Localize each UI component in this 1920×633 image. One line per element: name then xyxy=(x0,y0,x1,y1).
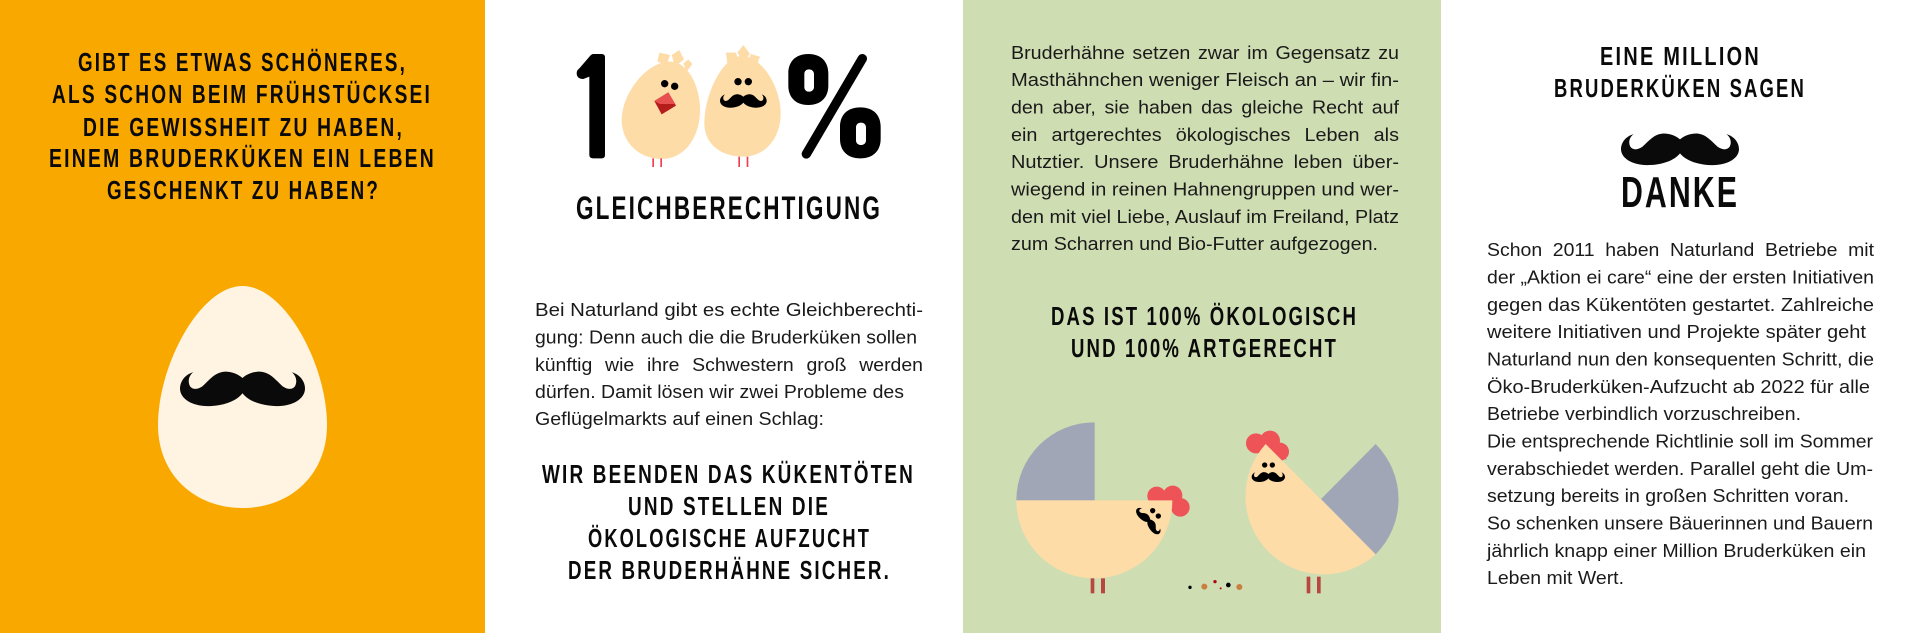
illustration: two roosters pecking xyxy=(1016,422,1399,593)
body text: equality: Bei Naturland gibt es echte Gleichberechti- xyxy=(535,299,923,320)
panel: equality xyxy=(485,0,963,633)
icon: egg with moustache xyxy=(158,286,327,508)
body text: initiative: verabschiedet werden. Parallel geht die Um- xyxy=(1487,458,1873,479)
heading: one million: BRUDERKÜKEN SAGEN xyxy=(1554,73,1806,103)
body text: initiative xyxy=(1486,239,1874,588)
chick with beak xyxy=(622,50,700,167)
heading: one million xyxy=(1554,41,1806,103)
body text: brother roosters: wiegend in reinen Hahnengruppen und wer- xyxy=(1010,178,1399,200)
body text: initiative: Die entsprechende Richtlinie soll im Sommer xyxy=(1487,430,1873,452)
heading: organic: UND 100% ARTGERECHT xyxy=(1071,333,1338,363)
panel: thanks xyxy=(1441,0,1920,633)
body text: initiative: Betriebe verbindlich vorzuschreiben. xyxy=(1487,403,1801,424)
percent sign xyxy=(788,54,881,158)
heading: organic: DAS IST 100% ÖKOLOGISCH xyxy=(1051,301,1358,331)
body text: initiative: der „Aktion ei care“ eine der ersten Initiativen xyxy=(1487,266,1874,288)
heading: question xyxy=(49,47,436,205)
chick with moustache xyxy=(704,45,781,167)
heading: equality: GLEICHBERECHTIGUNG xyxy=(576,190,882,226)
panel: green organic xyxy=(963,0,1441,633)
heading: statement: UND STELLEN DIE xyxy=(628,491,830,521)
heading: one million: EINE MILLION xyxy=(1600,41,1761,71)
body text: equality xyxy=(535,299,923,429)
heading: statement: DER BRUDERHÄHNE SICHER. xyxy=(568,555,891,585)
body text: brother roosters: Nutztier. Unsere Bruderhähne leben über- xyxy=(1011,151,1399,172)
body text: equality: künftig wie ihre Schwestern groß werden xyxy=(535,354,923,375)
body text: brother roosters: den aber, sie haben das gleiche Recht auf xyxy=(1011,96,1400,118)
heading: organic xyxy=(1051,301,1358,363)
numeral one xyxy=(577,54,605,158)
icon: moustache xyxy=(1621,134,1739,165)
body text: brother roosters: ein artgerechtes ökologisches Leben als xyxy=(1011,124,1399,145)
rooster bending down xyxy=(1016,422,1190,593)
heading: question: EINEM BRUDERKÜKEN EIN LEBEN xyxy=(49,143,436,173)
heading: statement xyxy=(542,459,915,585)
body text: initiative: setzung bereits in großen Schritten voran. xyxy=(1487,485,1849,506)
heading: question: GIBT ES ETWAS SCHÖNERES, xyxy=(78,47,407,77)
heading: statement: ÖKOLOGISCHE AUFZUCHT xyxy=(588,523,871,553)
panel: orange egg question xyxy=(0,0,485,633)
body text: initiative: weitere Initiativen und Projekte später geht xyxy=(1486,321,1866,342)
body text: brother roosters: den mit viel Liebe, Auslauf im Freiland, Platz xyxy=(1011,206,1399,227)
body text: initiative: Naturland nun den konsequenten Schritt, die xyxy=(1487,348,1874,370)
heading: thanks: DANKE xyxy=(1621,168,1739,217)
heading: question: ALS SCHON BEIM FRÜHSTÜCKSEI xyxy=(52,79,432,109)
body text: equality: dürfen. Damit lösen wir zwei Probleme des xyxy=(535,381,904,402)
heading: question: GESCHENKT ZU HABEN? xyxy=(107,175,380,205)
body text: brother roosters: Bruderhähne setzen zwar im Gegensatz zu xyxy=(1011,42,1399,63)
body text: initiative: Leben mit Wert. xyxy=(1487,567,1624,588)
body text: initiative: jährlich knapp einer Million Bruderküken ein xyxy=(1486,540,1866,561)
heading: question: DIE GEWISSHEIT ZU HABEN, xyxy=(83,112,404,142)
heading: statement: WIR BEENDEN DAS KÜKENTÖTEN xyxy=(542,459,915,489)
body text: brother roosters xyxy=(1010,42,1400,254)
body text: equality: gung: Denn auch die die Bruderküken sollen xyxy=(535,326,917,348)
body text: initiative: Öko-Bruderküken-Aufzucht ab 2022 für alle xyxy=(1487,376,1870,397)
body text: initiative: gegen das Kükentöten gestartet. Zahlreiche xyxy=(1487,294,1874,315)
graphic: 100 percent with two chicks xyxy=(577,45,881,167)
body text: initiative: So schenken unsere Bäuerinnen und Bauern xyxy=(1487,512,1873,534)
rooster standing upright xyxy=(1245,431,1399,593)
grain on the ground xyxy=(1188,580,1242,590)
body text: equality: Geflügelmarkts auf einen Schlag: xyxy=(535,408,824,429)
body text: brother roosters: Masthähnchen weniger Fleisch an – wir fin- xyxy=(1011,69,1399,90)
body text: brother roosters: zum Scharren und Bio-Futter aufgezogen. xyxy=(1011,233,1378,254)
body text: initiative: Schon 2011 haben Naturland Betriebe mit xyxy=(1487,239,1874,260)
